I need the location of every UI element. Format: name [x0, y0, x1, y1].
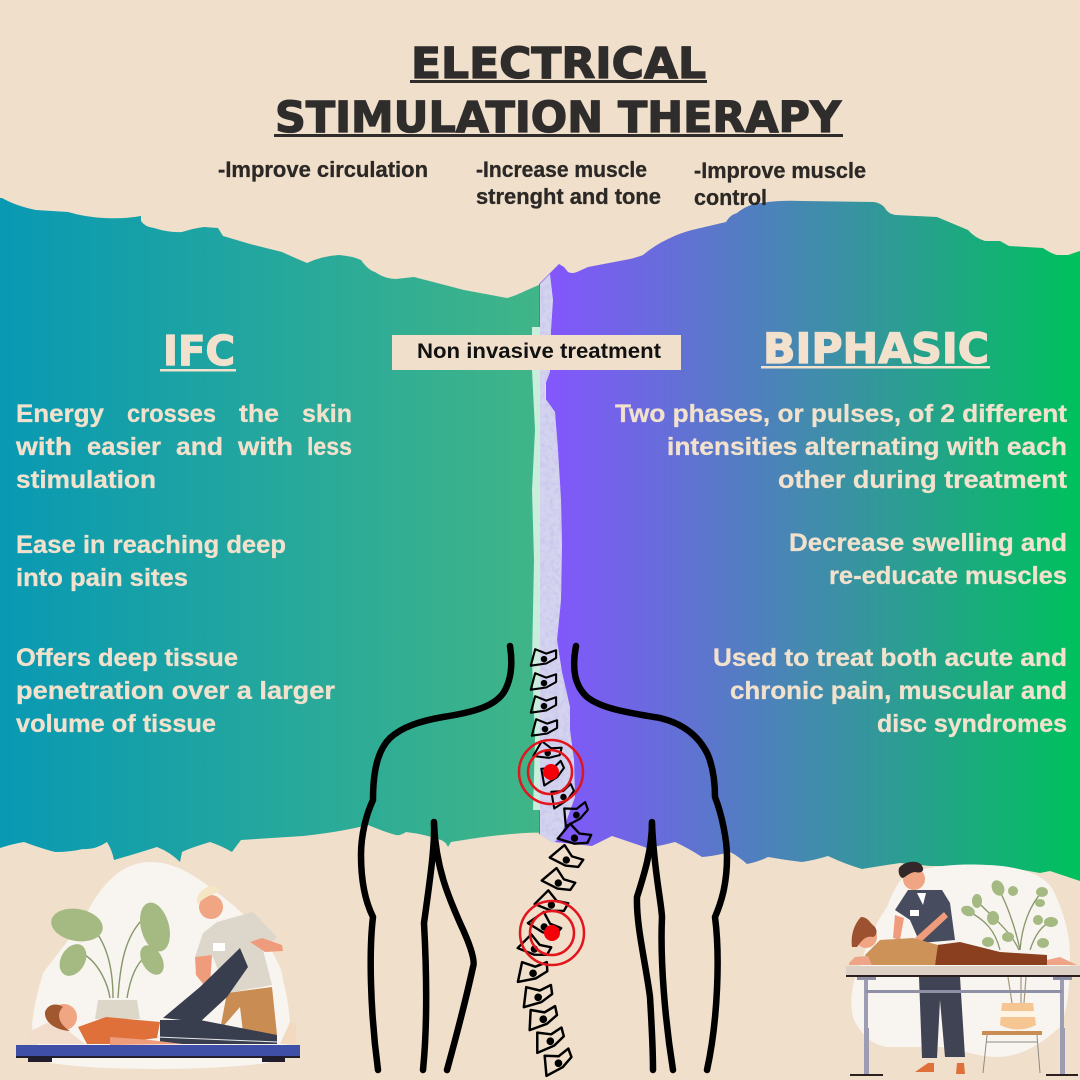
IFC text: deep tissue penetration: Offers deep tissue	[16, 644, 238, 672]
therapist head	[199, 895, 223, 919]
white blob	[32, 862, 290, 1069]
therapist shirt	[895, 890, 955, 943]
benefit: increase muscle strength and tone	[476, 157, 661, 209]
IFC text: energy crosses the skin: skin	[302, 400, 352, 428]
BIPHASIC text: decrease swelling: re-educate muscles	[829, 562, 1067, 590]
IFC text: energy crosses the skin: with	[237, 433, 293, 461]
IFC text: ease in reaching deep	[16, 531, 286, 592]
patient arm	[849, 956, 872, 965]
patient foot	[280, 1022, 296, 1044]
panel: IFC gradient background	[0, 198, 541, 862]
therapist shoes	[915, 1063, 965, 1074]
plant pot	[95, 1000, 140, 1019]
patient head	[855, 926, 877, 948]
patient shirt	[865, 938, 938, 965]
illustration: therapist stretching patient leg	[16, 862, 300, 1069]
benefit: improve muscle control: control	[694, 185, 767, 210]
patient foot	[1047, 957, 1077, 965]
IFC text: energy crosses the skin: easier	[87, 433, 161, 461]
therapist collar	[917, 893, 926, 905]
patient arm	[110, 1037, 183, 1045]
left side of torso and arm	[361, 646, 511, 1070]
therapist arms	[893, 912, 948, 943]
title: STIMULATION THERAPY	[275, 93, 842, 143]
label: non invasive treatment	[392, 335, 681, 370]
stems below table	[1008, 977, 1026, 1003]
mat	[16, 1045, 300, 1057]
IFC text: energy crosses the skin: the	[239, 400, 279, 428]
vase	[1000, 1003, 1036, 1030]
therapist badge	[910, 910, 919, 916]
plant stems	[968, 888, 1051, 950]
title	[274, 39, 843, 143]
IFC text: energy crosses the skin	[15, 400, 352, 494]
benefit: increase muscle strength and tone: strenght and tone	[476, 184, 661, 209]
mint paper edge	[532, 327, 546, 810]
right torso side	[652, 824, 673, 1070]
therapist hair	[899, 862, 923, 878]
patient hair	[45, 1004, 70, 1031]
patient trousers	[935, 942, 1047, 965]
BIPHASIC text: acute and chronic pain	[713, 644, 1067, 738]
BIPHASIC text: acute and chronic pain: Used to treat both acute and	[713, 644, 1067, 672]
IFC text: deep tissue penetration: penetration over a larger	[16, 677, 335, 705]
therapist hair	[197, 886, 220, 904]
therapist shirt	[195, 912, 277, 993]
spine vertebrae	[517, 649, 592, 1076]
patient head	[51, 1004, 77, 1030]
therapist trousers	[220, 987, 277, 1035]
patient hair	[852, 917, 877, 947]
pillow	[23, 1023, 85, 1044]
IFC text: energy crosses the skin: crosses	[127, 400, 216, 428]
pain marker: upper spine	[519, 740, 583, 804]
plant leaves	[960, 878, 1058, 948]
therapist trousers	[919, 977, 965, 1058]
IFC text: energy crosses the skin: stimulation	[16, 466, 156, 494]
IFC text: energy crosses the skin: Energy	[16, 400, 104, 428]
benefit: improve muscle control: -Improve muscle	[694, 158, 866, 183]
therapist arms	[195, 938, 283, 985]
BIPHASIC text: two phases: Two phases, or pulses, of 2 different	[615, 400, 1068, 428]
IFC text: energy crosses the skin: less	[307, 433, 352, 461]
lavender torn paper	[540, 274, 575, 843]
heading: IFC: IFC	[163, 327, 235, 375]
mat base	[16, 1056, 300, 1062]
BIPHASIC text: two phases: intensities alternating with each	[667, 433, 1067, 461]
IFC text: deep tissue penetration	[16, 644, 335, 738]
BIPHASIC text: two phases: other during treatment	[778, 466, 1068, 494]
side table	[982, 1031, 1042, 1073]
right inner arm	[637, 822, 653, 1070]
IFC text: ease in reaching deep: into pain sites	[16, 564, 188, 592]
patient shirt	[78, 1017, 160, 1044]
benefit: improve circulation: -Improve circulation	[218, 157, 428, 182]
BIPHASIC text: two phases	[615, 400, 1068, 494]
benefit: improve muscle control	[694, 158, 866, 210]
BIPHASIC text: acute and chronic pain: chronic pain, muscular and	[730, 677, 1067, 705]
title: ELECTRICAL	[411, 39, 706, 89]
plant leaves	[49, 899, 175, 981]
massage table	[846, 966, 1080, 1076]
patient lying leg	[160, 1020, 277, 1044]
torn paper strip down the centre	[532, 274, 575, 843]
IFC text: deep tissue penetration: volume of tissue	[16, 710, 216, 738]
IFC text: energy crosses the skin: and	[176, 433, 223, 461]
therapist head	[903, 868, 925, 890]
IFC text: ease in reaching deep: Ease in reaching deep	[16, 531, 286, 559]
IFC text: energy crosses the skin: with	[15, 433, 72, 461]
panel: BIPHASIC gradient background	[539, 201, 1080, 881]
white blob	[851, 865, 1070, 1057]
pain marker: lower spine	[520, 901, 584, 965]
patient leg stripe	[157, 1037, 277, 1042]
left torso side	[434, 824, 474, 1070]
BIPHASIC text: decrease swelling	[789, 529, 1067, 590]
BIPHASIC text: acute and chronic pain: disc syndromes	[877, 710, 1067, 738]
heading: BIPHASIC: BIPHASIC	[763, 324, 989, 373]
therapist badge	[213, 943, 225, 951]
illustration: therapist massaging patient back	[846, 862, 1080, 1076]
plant stems	[85, 917, 145, 998]
BIPHASIC text: decrease swelling: Decrease swelling and	[789, 529, 1067, 557]
label: non invasive treatment: Non invasive treatment	[417, 340, 661, 363]
right side of torso and arm	[574, 646, 727, 1070]
left inner arm	[423, 822, 434, 1070]
body outline	[361, 646, 727, 1070]
vase band	[1000, 1011, 1036, 1017]
patient raised leg	[163, 948, 248, 1022]
benefit: increase muscle strength and tone: -Increase muscle	[476, 157, 647, 182]
